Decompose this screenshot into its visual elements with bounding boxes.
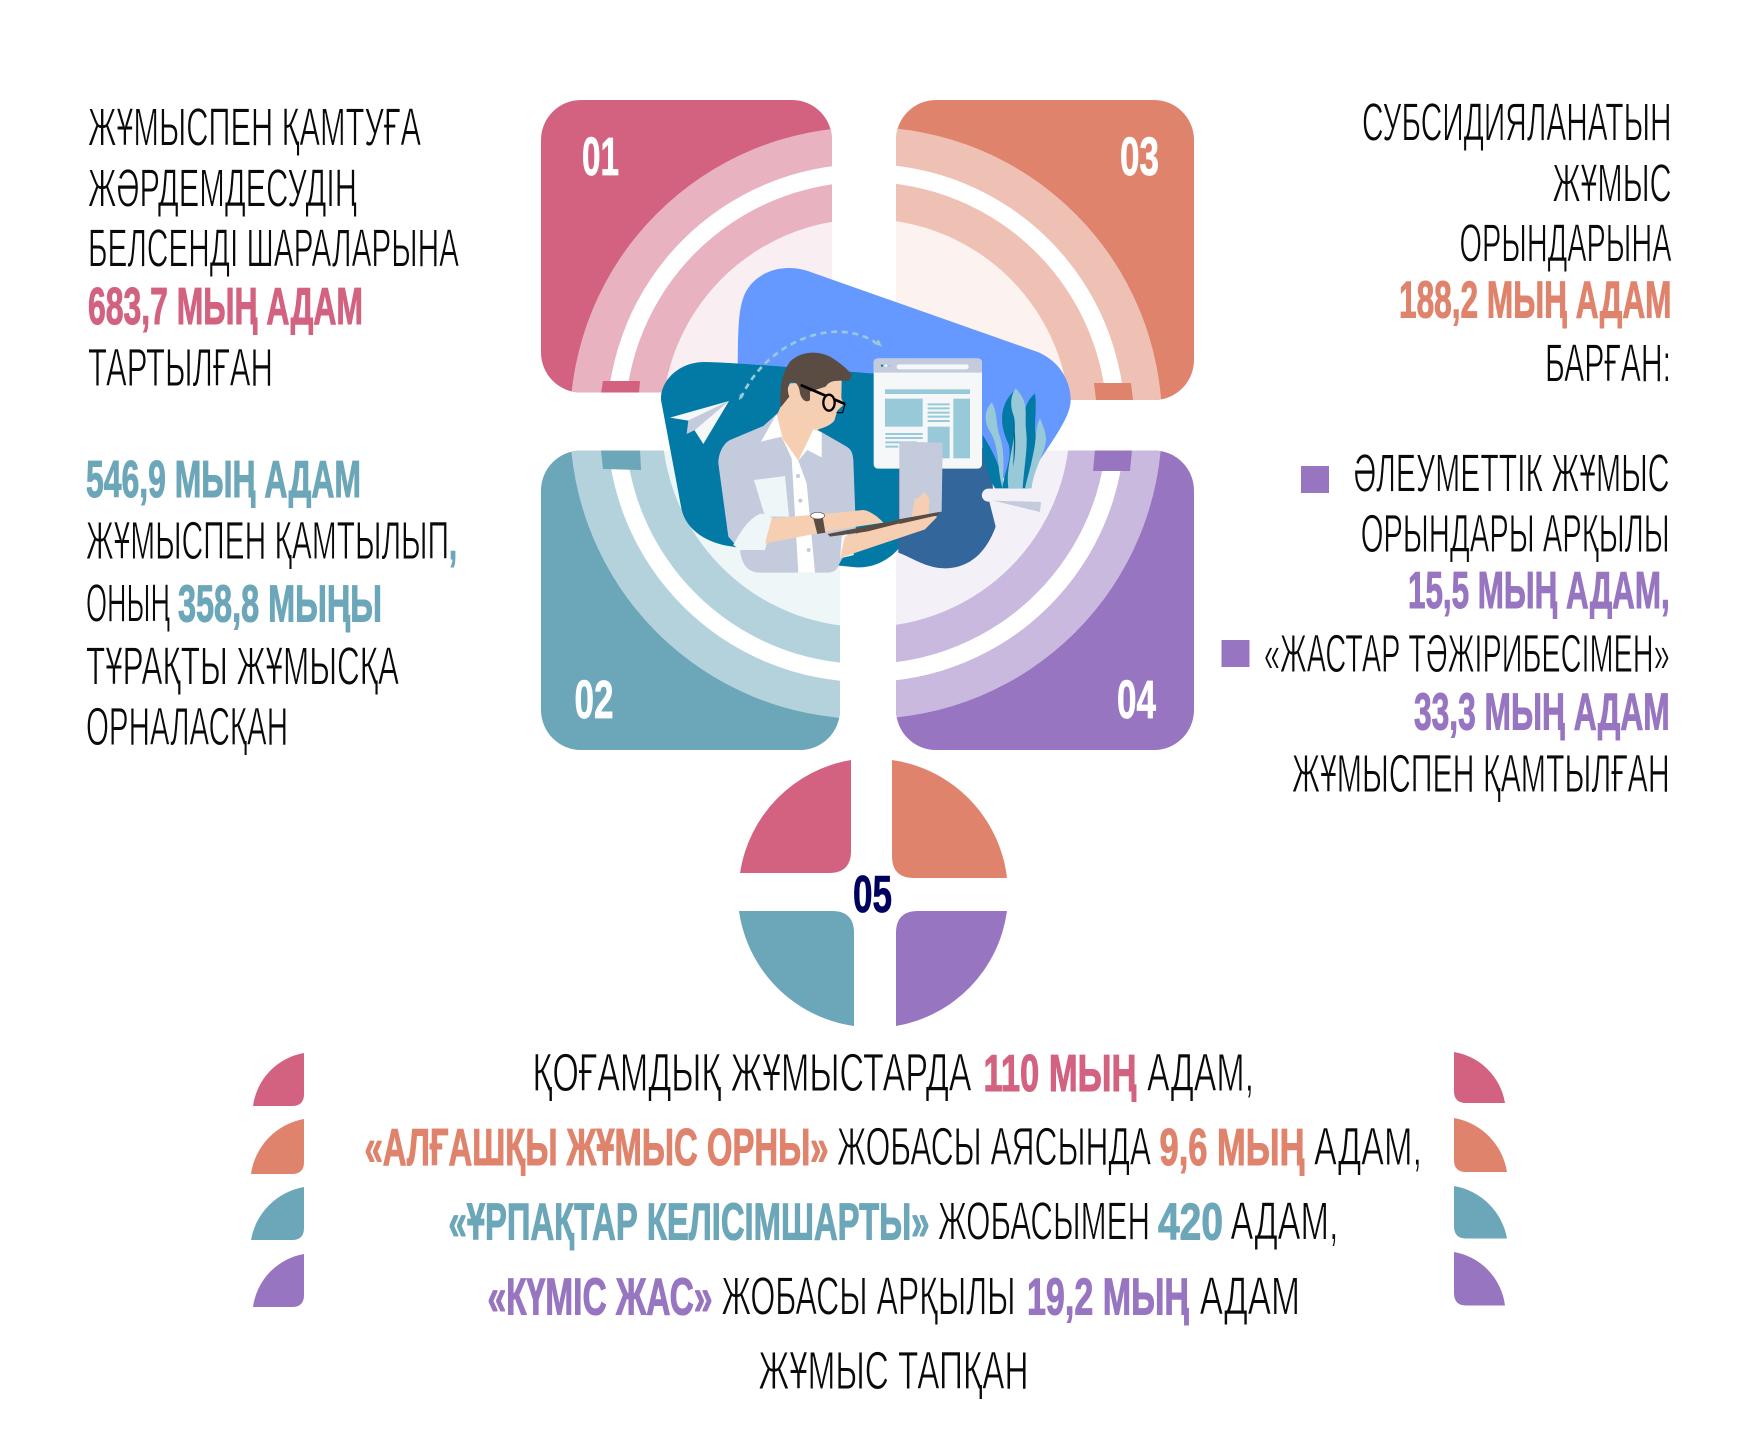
panel: card 02 <box>541 450 840 750</box>
segment: orange <box>892 760 1007 878</box>
panel: card 03 <box>896 100 1194 400</box>
arm holding laptop <box>840 492 937 558</box>
text: employed figures: 358,8 МЫҢЫ <box>178 576 382 634</box>
text: active measures intro <box>88 98 459 398</box>
text: employed figures <box>86 451 457 757</box>
shape: pink <box>253 1053 304 1106</box>
text: subsidised jobs: ЖҰМЫС <box>1552 154 1672 214</box>
decoration: left shapes <box>251 1053 304 1307</box>
bullet: social jobs <box>1301 466 1329 493</box>
arrow: dashed arc <box>739 332 882 401</box>
pocket and sleeve <box>754 476 789 517</box>
label: 05: 05 <box>853 866 892 924</box>
collar and placket <box>761 414 815 573</box>
text block: bottom <box>364 1043 1422 1401</box>
bullet: youth practice <box>1222 640 1250 667</box>
text: subsidised jobs <box>1362 92 1672 394</box>
shape: purple <box>1454 1252 1505 1306</box>
shape: purple <box>253 1254 304 1307</box>
blob: light blue <box>738 268 1071 483</box>
segment: purple <box>896 911 1007 1026</box>
line 2: ЖОБАСЫ АЯСЫНДА <box>837 1117 1151 1177</box>
text block: left column <box>86 98 459 757</box>
text: employed figures: ТҰРАҚТЫ ЖҰМЫСҚА <box>86 636 399 696</box>
line 4: «КҮМІС ЖАС» <box>488 1268 712 1326</box>
text: active measures intro: БЕЛСЕНДІ ШАРАЛАРЫНА <box>88 218 459 278</box>
segment: teal <box>739 911 854 1026</box>
watch <box>811 512 825 534</box>
icon: 05 circle <box>739 760 1007 1026</box>
shape: teal <box>251 1187 304 1240</box>
line 3: АДАМ, <box>1230 1192 1338 1252</box>
icon: laptop screen <box>899 442 943 519</box>
panel: card 04 <box>896 450 1194 750</box>
text: active measures intro: ЖҰМЫСПЕН ҚАМТУҒА <box>88 98 421 158</box>
line 3: ЖОБАСЫМЕН <box>938 1192 1150 1252</box>
shape: orange <box>1454 1118 1507 1172</box>
line 1: АДАМ, <box>1147 1043 1254 1103</box>
icon: paper plane <box>670 401 729 444</box>
glasses <box>801 385 845 413</box>
shape: teal <box>1454 1186 1507 1238</box>
text: social jobs <box>1354 444 1670 620</box>
line 1: ҚОҒАМДЫҚ ЖҰМЫСТАРДА <box>532 1043 972 1103</box>
text: active measures intro: ТАРТЫЛҒАН <box>88 338 273 398</box>
line 4: ЖОБАСЫ АРҚЫЛЫ <box>722 1266 1016 1326</box>
text: employed figures: , <box>449 513 457 571</box>
text: youth practice <box>1264 624 1670 804</box>
shape: orange <box>251 1119 304 1174</box>
line 3: 420 <box>1158 1194 1223 1252</box>
line 2: 9,6 МЫҢ <box>1160 1119 1304 1177</box>
label: 04: 04 <box>1117 670 1156 730</box>
label: 02: 02 <box>574 670 614 730</box>
hair <box>780 353 852 407</box>
icon: browser window <box>874 358 982 469</box>
line 2: АДАМ, <box>1314 1117 1422 1177</box>
segment: pink <box>740 760 851 873</box>
shirt <box>718 414 856 573</box>
illustration: man with laptop <box>661 268 1071 573</box>
text: active measures intro: ЖӘРДЕМДЕСУДІҢ <box>88 158 357 218</box>
blob: navy <box>898 447 996 568</box>
icon: plant in pot <box>982 388 1046 550</box>
label: 01: 01 <box>582 127 619 187</box>
tablet <box>828 520 899 537</box>
figure: man <box>718 353 939 573</box>
text: active measures intro: 683,7 МЫҢ АДАМ <box>88 278 363 336</box>
text: employed figures: ОРНАЛАСҚАН <box>86 697 288 757</box>
shape: pink <box>1454 1052 1505 1103</box>
panel: card 01 <box>541 100 832 392</box>
text: employed figures: ОНЫҢ <box>86 574 170 634</box>
text: employed figures: 546,9 МЫҢ АДАМ <box>86 451 361 509</box>
line 4 <box>488 1266 1300 1326</box>
label: 03: 03 <box>1120 127 1159 187</box>
line 1: 110 МЫҢ <box>984 1045 1136 1103</box>
blob: teal <box>661 362 907 567</box>
line 3: «ҰРПАҚТАР КЕЛІСІМШАРТЫ» <box>448 1194 930 1252</box>
skin: neck and face <box>777 381 844 461</box>
line 2: «АЛҒАШҚЫ ЖҰМЫС ОРНЫ» <box>364 1119 828 1177</box>
line 5: ЖҰМЫС ТАПҚАН <box>758 1341 1028 1401</box>
line 2 <box>364 1117 1422 1177</box>
decoration: right shapes <box>1454 1052 1507 1306</box>
text block: right column <box>1222 92 1672 804</box>
text: employed figures: ЖҰМЫСПЕН ҚАМТЫЛЫП <box>86 511 449 571</box>
line 4: АДАМ <box>1200 1266 1300 1326</box>
line 4: 19,2 МЫҢ <box>1027 1268 1189 1326</box>
arm typing <box>765 510 883 543</box>
